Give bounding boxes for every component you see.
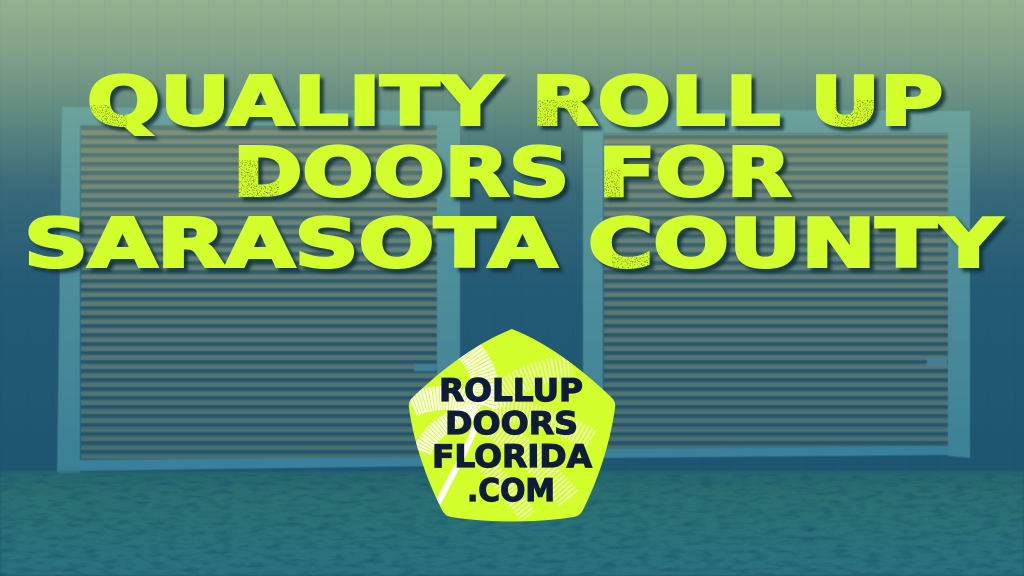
logo badge	[409, 329, 615, 522]
badge wordmark	[432, 373, 593, 509]
badge wordmark: .COM	[467, 473, 555, 509]
right door shutter	[604, 134, 948, 449]
right door latch	[927, 358, 947, 366]
badge wordmark: FLORIDA	[432, 439, 593, 475]
right door sill	[603, 446, 948, 458]
left roll up door	[57, 107, 460, 474]
grass foreground	[0, 472, 1024, 576]
right door frame	[583, 109, 970, 462]
left door sill	[80, 457, 437, 471]
icon: palm tree	[412, 350, 590, 516]
title	[24, 62, 1003, 282]
badge shape	[409, 329, 615, 522]
title: SARASOTA COUNTY	[24, 204, 1003, 282]
left door latch	[414, 364, 436, 371]
left door frame	[57, 107, 460, 474]
title: QUALITY ROLL UP	[87, 62, 943, 140]
left door shutter	[81, 126, 437, 461]
badge wordmark: ROLLUP	[439, 373, 583, 409]
title: DOORS FOR	[233, 134, 791, 212]
badge wordmark: DOORS	[445, 406, 578, 442]
right roll up door	[583, 109, 970, 462]
